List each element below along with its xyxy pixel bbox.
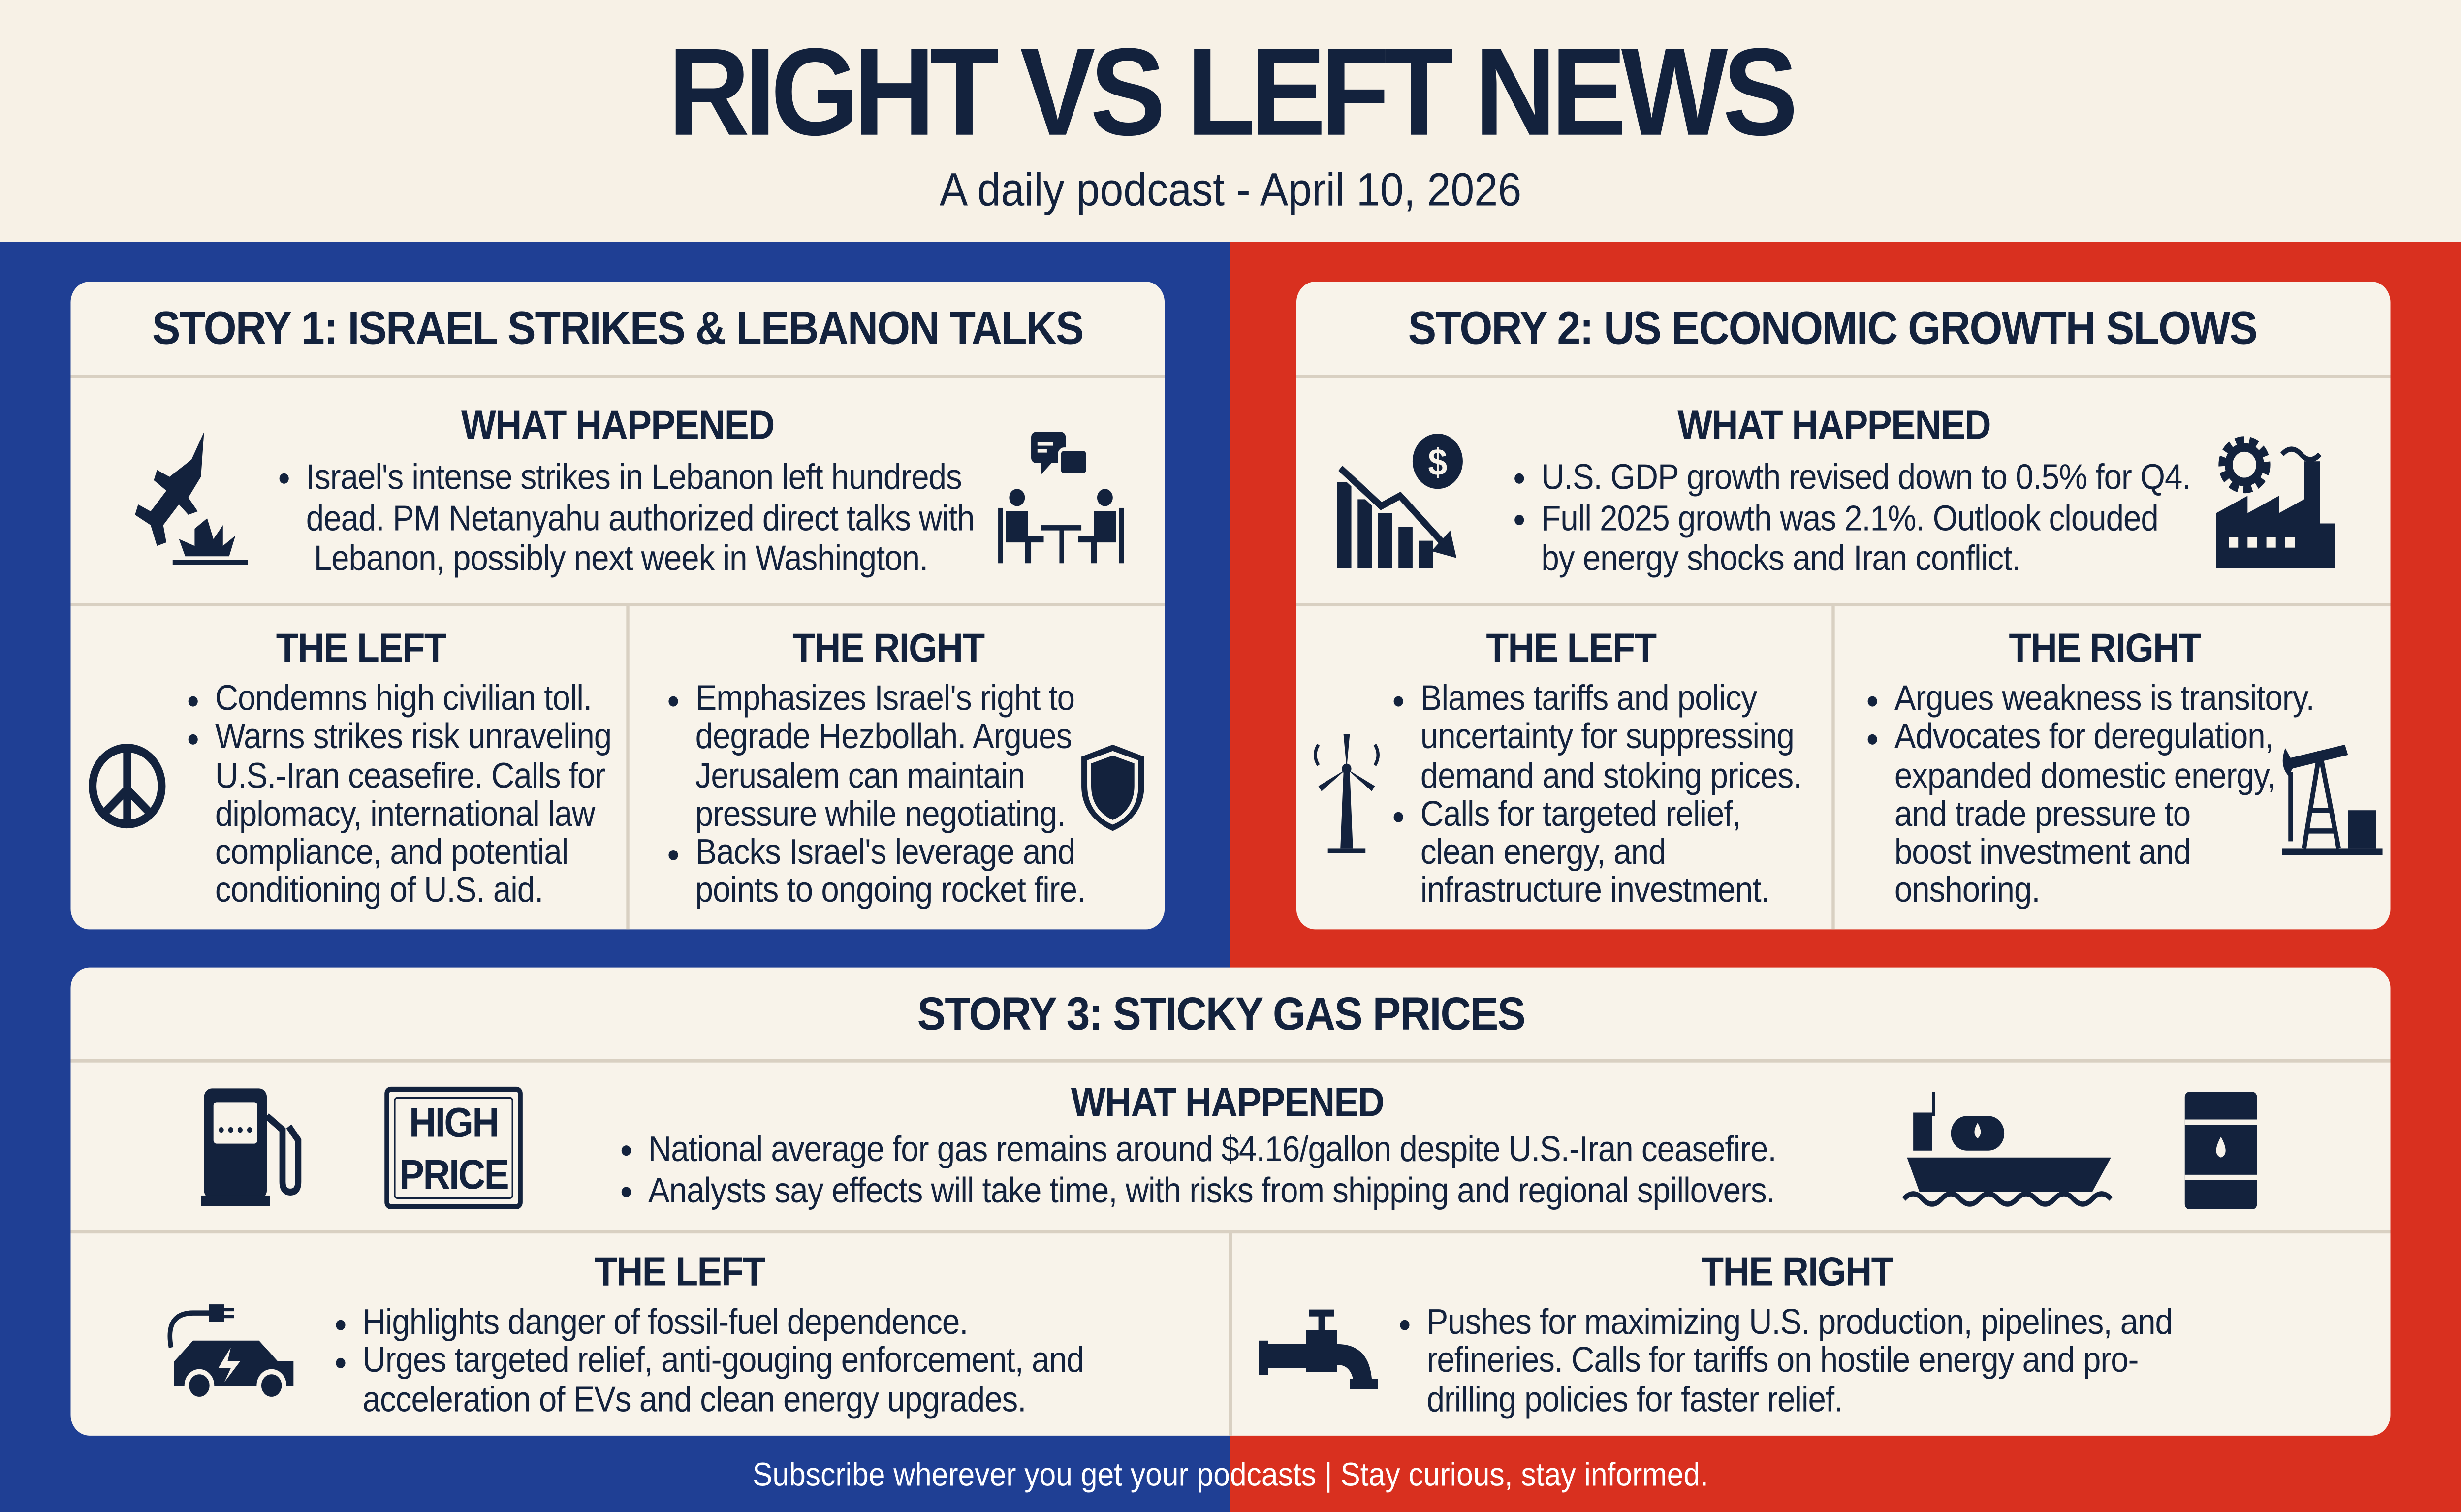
icon: wind turbine: [1313, 734, 1380, 853]
icon: oil barrel: [2184, 1092, 2257, 1209]
icon: falling chart with dollar: $: [1428, 441, 1447, 484]
text: right view: expanded domestic energy,: [1894, 756, 2275, 796]
text: left view: [336, 1303, 1084, 1419]
heading: what happened: WHAT HAPPENED: [461, 403, 774, 447]
panel: story 2: [1296, 282, 2391, 929]
heading: the right: THE RIGHT: [1701, 1249, 1893, 1294]
text: what happened: [280, 458, 974, 579]
icon: electric car: [167, 1304, 293, 1397]
text: what happened: National average for gas remains around $4.16/gallon despite U.S.-Iran ceasefire.: [648, 1130, 1776, 1169]
text: what happened: by energy shocks and Iran conflict.: [1541, 539, 2020, 579]
text: left view: conditioning of U.S. aid.: [215, 872, 543, 911]
text: left view: Warns strikes risk unraveling: [215, 718, 611, 757]
text: left view: infrastructure investment.: [1420, 872, 1769, 911]
heading: what happened: WHAT HAPPENED: [1677, 403, 1990, 447]
text: left view: clean energy, and: [1420, 833, 1666, 873]
text: right view: boost investment and: [1894, 833, 2191, 873]
panel: story 3: [70, 968, 2391, 1436]
text: right view: [1427, 1304, 2173, 1420]
title: RIGHT VS LEFT NEWS: [668, 24, 1793, 162]
text: what happened: dead. PM Netanyahu authorized direct talks with: [306, 499, 974, 538]
heading: story 1: STORY 1: ISRAEL STRIKES & LEBANON TALKS: [152, 302, 1083, 354]
heading: story 3: STORY 3: STICKY GAS PRICES: [917, 988, 1525, 1040]
heading: the left: THE LEFT: [276, 626, 446, 670]
icon: meeting: [998, 432, 1124, 563]
text: right view: [668, 679, 1085, 911]
text: right view: Argues weakness is transitory.: [1894, 679, 2314, 719]
icon: gas pump: [201, 1088, 301, 1206]
text: right view: points to ongoing rocket fire.: [695, 872, 1085, 911]
text: right view: onshoring.: [1894, 872, 2040, 911]
icon: jet and explosion: [135, 432, 248, 565]
heading: the left: THE LEFT: [595, 1249, 764, 1294]
text: left view: U.S.-Iran ceasefire. Calls for: [215, 756, 605, 796]
text: left view: Urges targeted relief, anti-gouging enforcement, and: [363, 1341, 1084, 1381]
icon: high price sign: PRICE: [399, 1152, 508, 1199]
icon: oil pump jack: [2282, 744, 2383, 855]
panel: story 1: [70, 282, 1165, 929]
text: right view: Pushes for maximizing U.S. production, pipelines, and: [1427, 1303, 2173, 1342]
text: what happened: U.S. GDP growth revised down to 0.5% for Q4.: [1541, 458, 2191, 498]
text: left view: demand and stoking prices.: [1420, 756, 1801, 796]
text: right view: Jerusalem can maintain: [695, 756, 1025, 796]
text: what happened: Analysts say effects will take time, with risks from shipping and regional spillovers.: [648, 1171, 1775, 1211]
text: left view: [1394, 679, 1801, 911]
icon: shield: [1081, 744, 1144, 831]
icon: tanker ship: [1902, 1092, 2113, 1207]
text: what happened: Israel's intense strikes in Lebanon left hundreds: [306, 458, 962, 498]
text: right view: refineries. Calls for tariffs on hostile energy and pro-: [1427, 1341, 2138, 1381]
text: right view: [1867, 679, 2314, 911]
footer: Subscribe wherever you get your podcasts | Stay curious, stay informed.: [753, 1458, 1708, 1494]
icon: falling chart with dollar: [1337, 434, 1463, 568]
text: what happened: Full 2025 growth was 2.1%. Outlook clouded: [1541, 499, 2158, 538]
heading: what happened: WHAT HAPPENED: [1071, 1080, 1384, 1125]
icon: high price sign: HIGH: [409, 1101, 498, 1147]
text: left view: compliance, and potential: [215, 833, 568, 873]
text: right view: Advocates for deregulation,: [1894, 718, 2273, 757]
icon: factory and gear: [2216, 436, 2335, 568]
text: right view: degrade Hezbollah. Argues: [695, 718, 1072, 757]
text: left view: Calls for targeted relief,: [1420, 794, 1741, 834]
text: left view: Highlights danger of fossil-fuel dependence.: [363, 1303, 968, 1342]
text: what happened: [1514, 458, 2191, 579]
text: left view: [188, 679, 611, 911]
heading: story 2: STORY 2: US ECONOMIC GROWTH SLOWS: [1408, 302, 2257, 354]
icon: peace sign: [89, 744, 165, 829]
text: left view: uncertainty for suppressing: [1420, 718, 1794, 757]
text: what happened: [621, 1130, 1776, 1211]
text: right view: Emphasizes Israel's right to: [695, 679, 1074, 719]
text: left view: acceleration of EVs and clean energy upgrades.: [363, 1380, 1026, 1419]
text: right view: pressure while negotiating.: [695, 794, 1065, 834]
text: right view: Backs Israel's leverage and: [695, 833, 1075, 873]
background: left blue: [0, 242, 1230, 1512]
heading: the left: THE LEFT: [1486, 626, 1656, 670]
text: left view: Condemns high civilian toll.: [215, 679, 592, 719]
text: what happened: Lebanon, possibly next week in Washington.: [314, 539, 928, 579]
background: right red: [1230, 242, 2461, 1512]
text: right view: drilling policies for faster relief.: [1427, 1380, 1842, 1419]
text: left view: diplomacy, international law: [215, 794, 595, 834]
heading: the right: THE RIGHT: [792, 626, 984, 670]
heading: the right: THE RIGHT: [2009, 626, 2201, 670]
text: left view: Blames tariffs and policy: [1420, 679, 1757, 719]
icon: high price sign: [384, 1087, 523, 1209]
subtitle: A daily podcast - April 10, 2026: [940, 164, 1521, 216]
icon: pipe valve: [1256, 1310, 1384, 1396]
text: right view: and trade pressure to: [1894, 794, 2190, 834]
